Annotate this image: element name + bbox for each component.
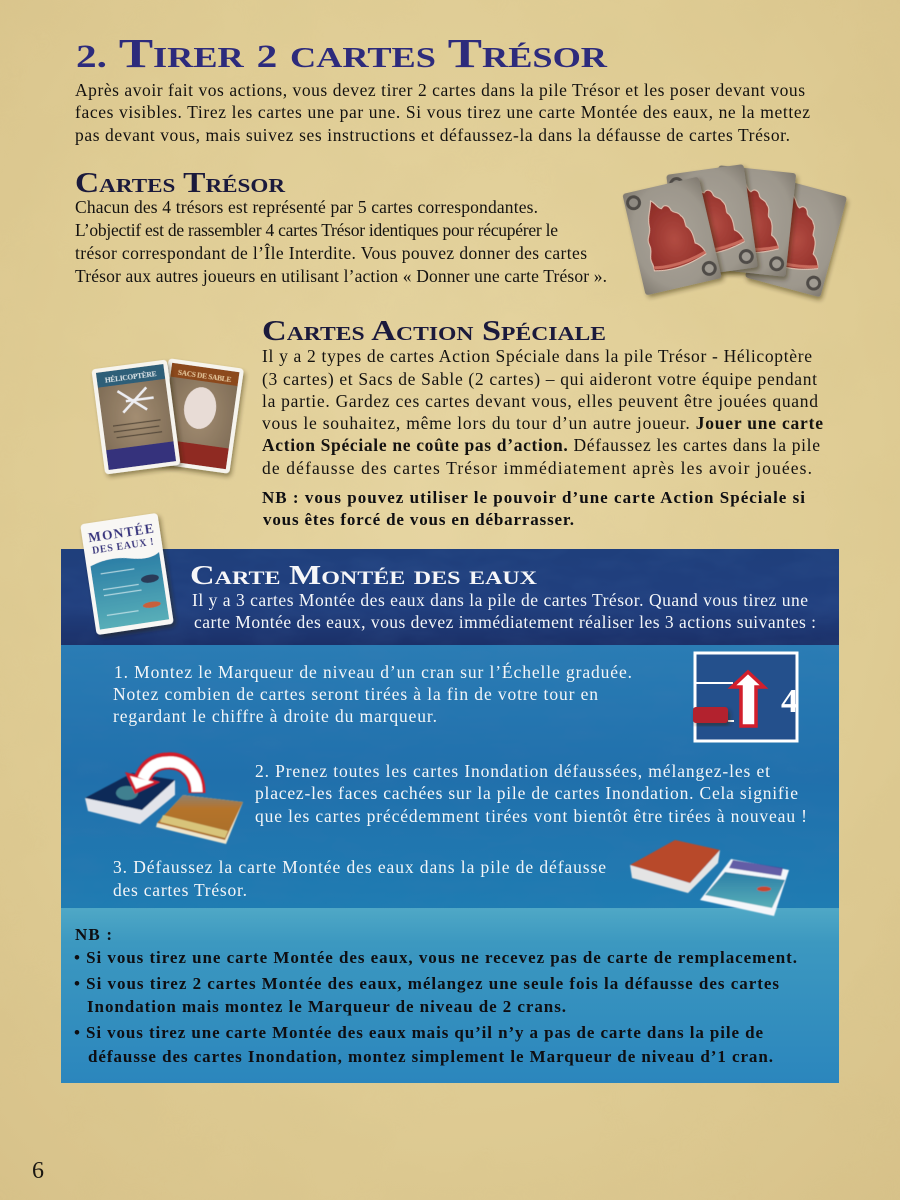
- arrow: level up: [732, 672, 764, 726]
- step 2 text: [255, 761, 807, 826]
- water mottling: [61, 549, 839, 909]
- title: 2. Tirer 2 cartes Trésor: [76, 30, 608, 76]
- heading: Cartes Action Spéciale: Cartes Action Spéciale: [262, 315, 606, 347]
- text block: Cartes Trésor: [75, 197, 607, 286]
- text block: Cartes Trésor: Chacun des 4 trésors est représenté par 5 cartes correspondantes.: [75, 197, 538, 217]
- text block: Cartes Trésor: Trésor aux autres joueurs en utilisant l’action « Donner une carte Trésor ».: [75, 266, 607, 286]
- heading: Carte Montée des eaux: Carte Montée des eaux: [190, 560, 537, 590]
- step 1 text: [113, 662, 632, 726]
- notes block: • Si vous tirez une carte Montée des eaux mais qu’il n’y a pas de carte dans la pile de: [74, 1023, 763, 1042]
- step 1 text: 1. Montez le Marqueur de niveau d’un cran sur l’Échelle graduée.: [114, 662, 632, 682]
- text block: Cartes Action Spéciale: Action Spéciale ne coûte pas d’action. Défaussez les cartes dans la pile: [262, 435, 820, 455]
- notes block: [74, 925, 797, 1066]
- intro text block: [75, 80, 810, 145]
- text block: Cartes Action Spéciale: [262, 346, 823, 478]
- icon: water level gauge: [693, 653, 798, 741]
- icon: fan of four treasure cards: [622, 164, 847, 297]
- level marker: [693, 707, 728, 723]
- intro text block: pas devant vous, mais suivez ses instructions et défaussez-la dans la défausse de cartes Trésor.: [75, 125, 790, 145]
- panel band: light blue notes: [61, 908, 839, 1083]
- notes block: Inondation mais montez le Marqueur de niveau de 2 crans.: [87, 997, 566, 1016]
- notes block: • Si vous tirez 2 cartes Montée des eaux, mélangez une seule fois la défausse des cartes: [74, 974, 779, 993]
- icon: Hélicoptère card: HÉLICOPTÈRE: [104, 368, 157, 385]
- icon: Hélicoptère card: [91, 359, 181, 475]
- step 3 text: 3. Défaussez la carte Montée des eaux dans la pile de défausse: [113, 857, 606, 877]
- header text: [192, 590, 816, 632]
- icon: Montée des eaux card: DES EAUX !: [91, 537, 154, 557]
- text block: Cartes Action Spéciale: Il y a 2 types de cartes Action Spéciale dans la pile Trésor - Hélicoptère: [262, 346, 812, 366]
- icon: Montée des eaux card: [80, 513, 174, 635]
- text block: Cartes Action Spéciale: la partie. Gardez ces cartes devant vous, elles peuvent être jouées quand: [262, 391, 818, 411]
- header text: Il y a 3 cartes Montée des eaux dans la pile de cartes Trésor. Quand vous tirez une: [192, 590, 808, 610]
- heading: Cartes Trésor: Cartes Trésor: [75, 167, 286, 199]
- step 1 text: Notez combien de cartes seront tirées à la fin de votre tour en: [113, 684, 598, 704]
- arrow: curved red: [125, 761, 197, 794]
- note: NB special action cards: [262, 488, 805, 529]
- page number: 6: [32, 1158, 44, 1184]
- step 2 text: que les cartes précédemment tirées vont bientôt être tirées à nouveau !: [255, 806, 807, 826]
- icon: Montée des eaux card: MONTÉE: [87, 521, 155, 545]
- panel: Carte Montée des eaux: [61, 549, 839, 1083]
- text block: Cartes Action Spéciale: de défausse des cartes Trésor immédiatement après les avoir jouées.: [262, 458, 812, 478]
- step 3 text: [113, 857, 606, 900]
- text block: Cartes Action Spéciale: vous le souhaitez, même lors du tour d’un autre joueur. Jouer une carte: [262, 413, 823, 433]
- panel band: blue steps: [61, 645, 839, 909]
- number 4: 4: [781, 683, 798, 720]
- intro text block: Après avoir fait vos actions, vous devez tirer 2 cartes dans la pile Trésor et les poser devant vous: [75, 80, 805, 100]
- text block: Cartes Action Spéciale: (3 cartes) et Sacs de Sable (2 cartes) – qui aideront votre équipe pendant: [262, 369, 817, 389]
- text block: Cartes Trésor: L’objectif est de rassembler 4 cartes Trésor identiques pour récupérer le: [75, 220, 558, 240]
- intro text block: faces visibles. Tirez les cartes une par une. Si vous tirez une carte Montée des eaux, ne la mettez: [75, 102, 810, 122]
- text block: Cartes Trésor: trésor correspondant de l’Île Interdite. Vous pouvez donner des cartes: [75, 243, 587, 263]
- step 2 text: placez-les faces cachées sur la pile de cartes Inondation. Cela signifie: [255, 783, 798, 803]
- note: NB special action cards: NB : vous pouvez utiliser le pouvoir d’une carte Action Spéciale si: [262, 488, 805, 507]
- step 2 text: 2. Prenez toutes les cartes Inondation défaussées, mélangez-les et: [255, 761, 770, 781]
- icon: reshuffle flood discard: [85, 761, 243, 844]
- notes block: NB :: [75, 925, 112, 944]
- icon: treasure deck and discarded card: [630, 840, 789, 916]
- panel band: navy header: [61, 549, 839, 645]
- step 3 text: des cartes Trésor.: [113, 880, 247, 900]
- step 1 text: regardant le chiffre à droite du marqueur.: [113, 706, 437, 726]
- header text: carte Montée des eaux, vous devez immédiatement réaliser les 3 actions suivantes :: [194, 612, 816, 632]
- notes block: • Si vous tirez une carte Montée des eaux, vous ne recevez pas de carte de remplacement.: [74, 948, 797, 967]
- icon: Sacs de Sable card: SACS DE SABLE: [177, 368, 232, 384]
- icon: Sacs de Sable card: [154, 358, 244, 474]
- note: NB special action cards: vous êtes forcé de vous en débarrasser.: [263, 510, 574, 529]
- notes block: défausse des cartes Inondation, montez simplement le Marqueur de niveau d’1 cran.: [88, 1047, 773, 1066]
